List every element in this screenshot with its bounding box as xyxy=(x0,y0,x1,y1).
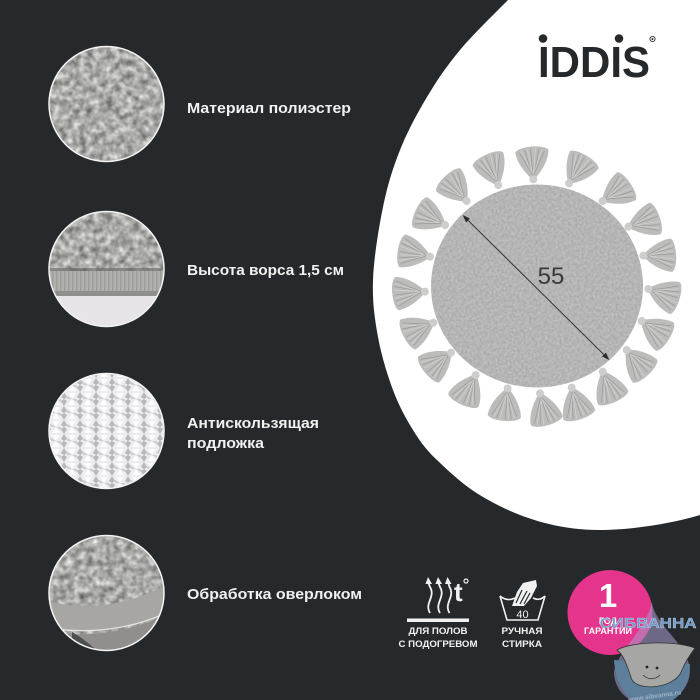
IDDIS logo: IDDIS xyxy=(538,38,650,87)
heated floor label: ДЛЯ ПОЛОВ xyxy=(408,626,468,637)
feature 3 label: подложка xyxy=(187,435,265,452)
warranty badge: 1 xyxy=(599,577,617,614)
face xyxy=(643,666,660,679)
feature 3 label: Антискользящая xyxy=(187,415,319,432)
tub xyxy=(617,643,695,687)
feature 2 label: Высота ворса 1,5 см xyxy=(187,262,344,279)
hand wash label: РУЧНАЯ xyxy=(502,626,543,637)
feature 1 label: Материал полиэстер xyxy=(187,100,351,117)
icon: heated floor: t xyxy=(454,577,463,607)
diameter arrow xyxy=(463,215,609,360)
heated floor label: С ПОДОГРЕВОМ xyxy=(398,639,478,650)
feature 3 label xyxy=(187,415,319,452)
hand wash label xyxy=(502,626,543,650)
icon: hand wash 40 degrees xyxy=(500,580,545,621)
heated floor label xyxy=(398,626,478,650)
rug body xyxy=(430,184,644,388)
feature 1 swatch: pile texture xyxy=(49,46,165,162)
diameter value: 55 xyxy=(538,263,564,290)
watermark: bathtub in a drop xyxy=(600,602,697,700)
warranty badge xyxy=(568,570,652,655)
feature 3 swatch: anti-slip mesh xyxy=(49,373,165,489)
icon: heated floor xyxy=(407,577,469,622)
hand wash label: СТИРКА xyxy=(502,639,542,650)
drop xyxy=(614,602,690,700)
tassels xyxy=(391,146,685,429)
brand name: СИБВАННА xyxy=(600,616,697,632)
warranty badge: ГАРАНТИИ xyxy=(584,626,632,636)
feature 2 swatch: pile height xyxy=(49,211,165,328)
feature 4 swatch: overlock edge xyxy=(45,535,168,655)
round rug with tassels xyxy=(391,146,685,429)
white curved panel xyxy=(373,0,700,530)
icon: hand wash 40 degrees: 40 xyxy=(516,609,529,621)
feature 4 label: Обработка оверлоком xyxy=(187,586,362,603)
warranty badge: ГОД xyxy=(599,616,618,626)
